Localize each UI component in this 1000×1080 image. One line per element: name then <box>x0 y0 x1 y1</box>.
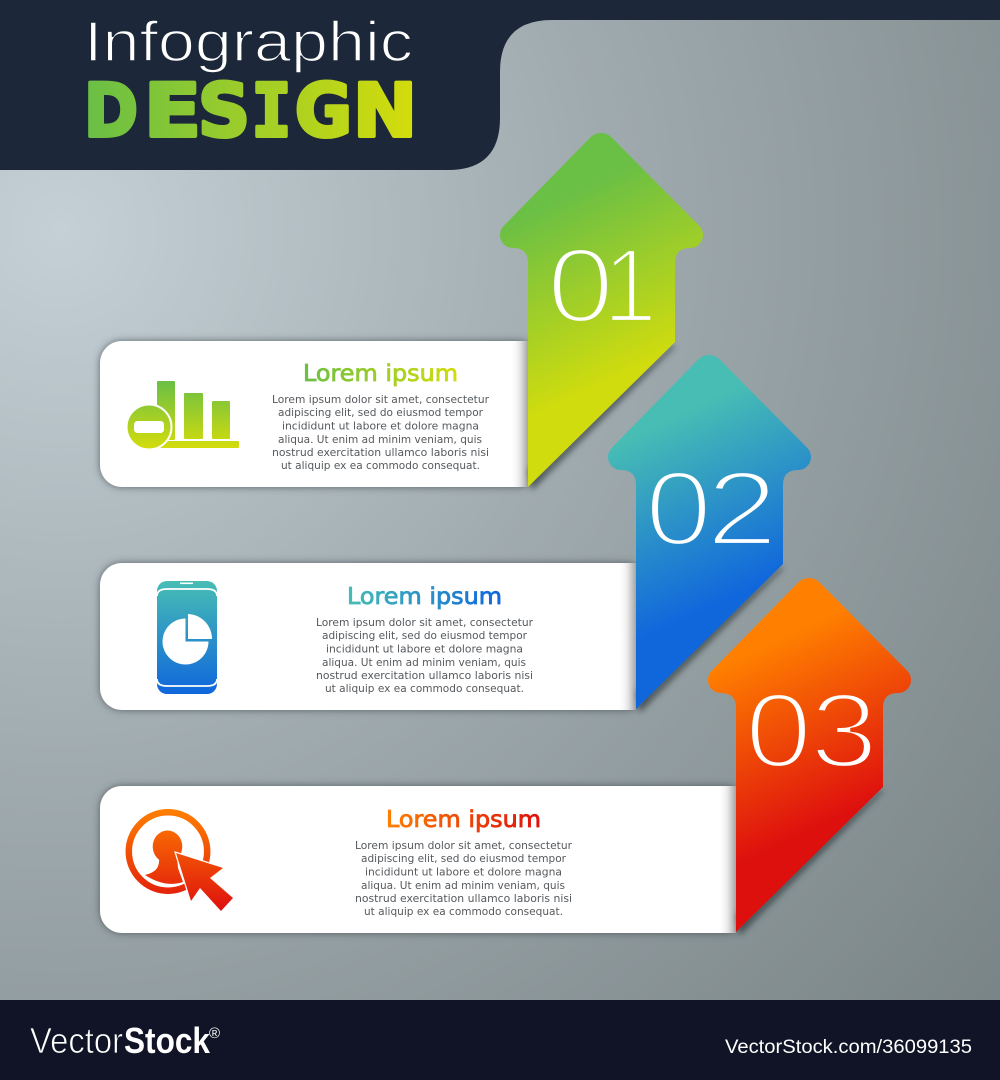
step 3 body text: aliqua. Ut enim ad minim veniam, quis <box>361 880 565 892</box>
step 2 body text <box>316 617 534 695</box>
title: DESIGN: I <box>252 69 292 154</box>
step 3 number <box>745 672 878 790</box>
step 2 heading: Lorem ipsum <box>347 584 502 610</box>
step 1 number <box>547 227 657 345</box>
step 2 arrow shadow <box>636 567 784 713</box>
step 3 icon: user with cursor <box>129 812 233 911</box>
step 3 body text: ut aliquip ex ea commodo consequat. <box>364 906 563 918</box>
step 2 card <box>100 563 648 710</box>
title: DESIGN <box>84 69 417 154</box>
step 3 number: 0 <box>745 672 812 790</box>
step 2 number: 2 <box>706 450 778 568</box>
step 3 <box>100 578 911 936</box>
step 3 body text: incididunt ut labore et dolore magna <box>365 866 562 878</box>
title: Infographic: Infographic <box>84 10 413 74</box>
step 1 card <box>100 341 540 487</box>
step 1 arrow <box>500 133 703 487</box>
footer logo: Stock <box>124 1020 211 1061</box>
step 2 icon: phone with pie chart <box>157 581 217 694</box>
title: DESIGN: N <box>353 69 417 154</box>
step 1 arrow shadow <box>528 345 676 491</box>
step 2 number <box>645 450 778 568</box>
step 3 arrow <box>708 578 911 932</box>
step 3 body text: adipiscing elit, sed do eiusmod tempor <box>361 853 567 865</box>
step 2 number: 0 <box>645 450 712 568</box>
step 1 number: 1 <box>603 227 657 345</box>
step 2 body text: incididunt ut labore et dolore magna <box>326 644 523 656</box>
step 1 card fold shade <box>510 341 528 487</box>
step 1 body text: aliqua. Ut enim ad minim veniam, quis <box>278 434 482 446</box>
step 1 heading: Lorem ipsum <box>303 361 458 387</box>
step 3 arrow shadow <box>736 790 884 936</box>
step 1 <box>100 133 703 491</box>
header panel <box>0 0 1000 170</box>
step 2 body text: nostrud exercitation ullamco laboris nisi <box>316 670 533 682</box>
step 1 body text: nostrud exercitation ullamco laboris nisi <box>272 447 489 459</box>
step 3 body text: Lorem ipsum dolor sit amet, consectetur <box>355 840 573 852</box>
step 1 body text: adipiscing elit, sed do eiusmod tempor <box>278 407 484 419</box>
step 1 body text: ut aliquip ex ea commodo consequat. <box>281 460 480 472</box>
step 3 number: 3 <box>810 672 878 790</box>
step 2 <box>100 355 811 713</box>
step 1 icon: bar chart with minus <box>126 381 239 450</box>
step 1 body text: Lorem ipsum dolor sit amet, consectetur <box>272 394 490 406</box>
step 1 number: 0 <box>547 227 614 345</box>
title: DESIGN: D <box>84 69 138 154</box>
step 3 card <box>100 786 748 933</box>
step 2 body text: adipiscing elit, sed do eiusmod tempor <box>322 630 528 642</box>
title: DESIGN: E <box>144 69 201 154</box>
step 2 body text: Lorem ipsum dolor sit amet, consectetur <box>316 617 534 629</box>
step 2 body text: aliqua. Ut enim ad minim veniam, quis <box>322 657 526 669</box>
step 2 body text: ut aliquip ex ea commodo consequat. <box>325 683 524 695</box>
step 1 body text <box>272 394 490 472</box>
footer logo: Vector <box>30 1020 123 1061</box>
step 3 body text <box>355 840 573 918</box>
step 2 card fold shade <box>618 563 636 710</box>
footer url: VectorStock.com/36099135 <box>725 1037 972 1058</box>
title: DESIGN: S <box>198 69 250 154</box>
title: DESIGN: G <box>295 69 352 154</box>
footer logo: ® <box>209 1025 220 1042</box>
step 3 body text: nostrud exercitation ullamco laboris nisi <box>355 893 572 905</box>
footer logo <box>30 1020 220 1061</box>
step 3 card fold shade <box>718 786 736 933</box>
step 3 heading: Lorem ipsum <box>386 807 541 833</box>
footer bar <box>0 1000 1000 1080</box>
step 2 arrow <box>608 355 811 709</box>
step 1 body text: incididunt ut labore et dolore magna <box>282 420 479 432</box>
